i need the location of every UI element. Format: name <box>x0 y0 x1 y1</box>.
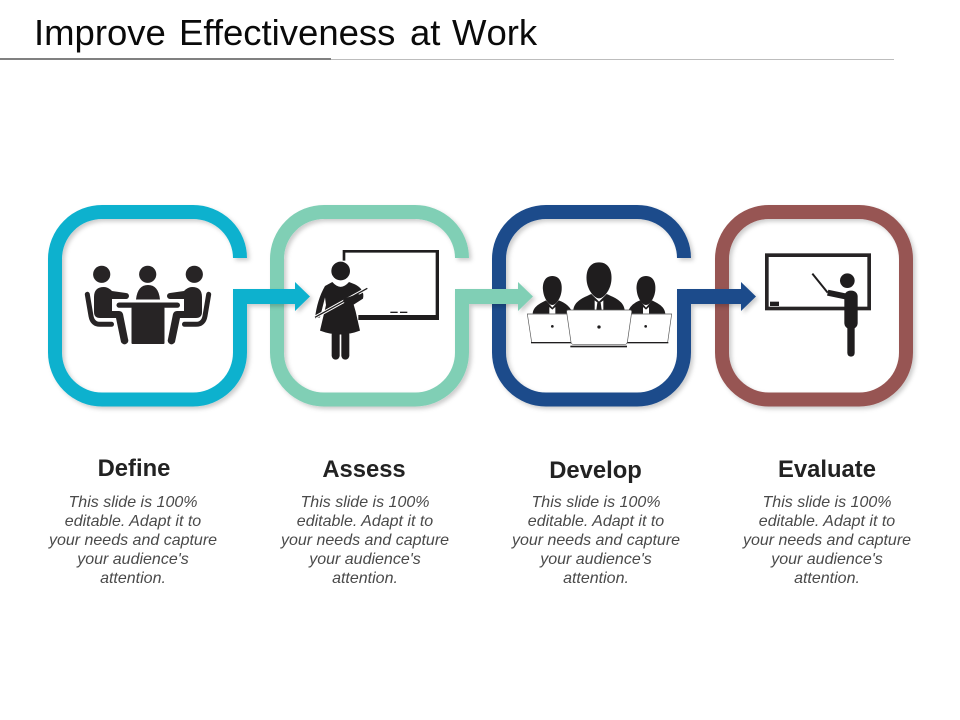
text block: define: your needs and capture <box>48 532 217 549</box>
text block: develop: editable. Adapt it to <box>528 513 664 530</box>
text block: evaluate: editable. Adapt it to <box>759 513 895 530</box>
icon: presenter pointing at board <box>767 255 869 357</box>
panel: develop ring with arrow <box>499 212 756 400</box>
icon: three people with laptops <box>527 262 672 347</box>
title: Effectiveness <box>179 12 395 53</box>
text block: assess: your audience's <box>308 551 421 568</box>
text block: develop: your audience's <box>539 551 652 568</box>
text block: define: This slide is 100% <box>69 494 197 511</box>
text block: evaluate: attention. <box>794 570 860 587</box>
arrow: define to assess <box>233 282 310 311</box>
text block: define: editable. Adapt it to <box>65 513 201 530</box>
text block: define: your audience's <box>76 551 189 568</box>
panel: evaluate ring <box>722 212 906 400</box>
heading: assess: Assess <box>322 456 406 483</box>
title: at <box>410 12 440 53</box>
text block: evaluate: This slide is 100% <box>763 494 891 511</box>
arrow: assess to develop <box>455 282 533 311</box>
text block: develop: attention. <box>563 570 629 587</box>
panel: assess ring with arrow <box>277 212 533 400</box>
text block: develop: your needs and capture <box>511 532 680 549</box>
heading: evaluate: Evaluate <box>778 456 876 483</box>
heading: develop: Develop <box>549 457 642 484</box>
text block: assess: attention. <box>332 570 398 587</box>
text block: assess: This slide is 100% <box>301 494 429 511</box>
text block: evaluate: your audience's <box>770 551 883 568</box>
icon: teacher at whiteboard <box>315 250 439 360</box>
text block: define: attention. <box>100 570 166 587</box>
text block: develop: This slide is 100% <box>532 494 660 511</box>
text block: evaluate: your needs and capture <box>742 532 911 549</box>
heading: define: Define <box>98 455 170 482</box>
icon: meeting at table <box>87 266 209 344</box>
arrow: develop to evaluate <box>677 282 756 311</box>
title: Work <box>452 12 538 53</box>
text block: assess: editable. Adapt it to <box>297 513 433 530</box>
panel: define ring with arrow <box>55 212 310 400</box>
title: Improve <box>34 12 166 53</box>
text block: assess: your needs and capture <box>280 532 449 549</box>
